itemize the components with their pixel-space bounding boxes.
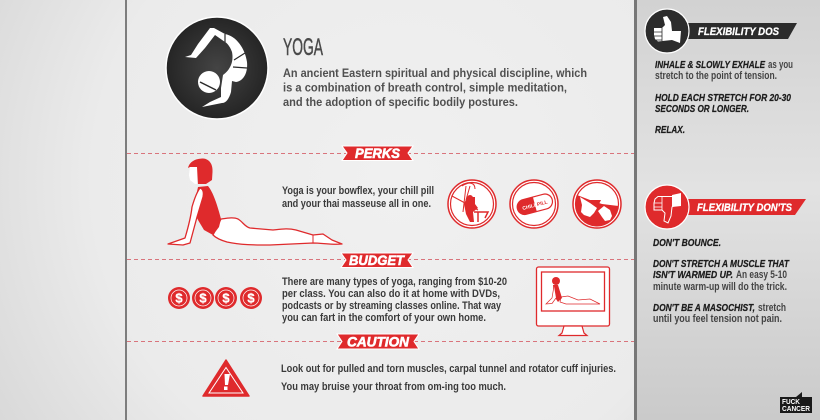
- logo: fuck cancer: CANCER: [782, 406, 810, 413]
- sidebar background: [636, 0, 820, 420]
- icon: four dollar coins: $: [222, 290, 230, 306]
- icon: chill pill: CHILL: [522, 202, 538, 212]
- don'ts text: ISN'T WARMED UP.: [653, 269, 733, 281]
- perks text: Yoga is your bowflex, your chill pill: [282, 185, 434, 197]
- don'ts text: DON'T BOUNCE.: [653, 237, 721, 249]
- perks text: [282, 185, 434, 210]
- caution text: Look out for pulled and torn muscles, carpal tunnel and rotator cuff injuries.: [281, 363, 616, 375]
- banner: don'ts: FLEXIBILITY DON'TS: [697, 202, 793, 214]
- illustration: cobra pose: [168, 158, 342, 245]
- banner: dos: FLEXIBILITY DOS: [698, 26, 780, 38]
- don'ts text: [653, 237, 790, 325]
- icon: bowflex: [448, 180, 496, 228]
- icon: massage hands: [573, 180, 621, 228]
- budget text: There are many types of yoga, ranging from $10-20: [282, 276, 507, 288]
- description: [283, 66, 587, 109]
- ribbon: budget: BUDGET: [349, 253, 406, 268]
- caution text: You may bruise your throat from om-ing too much.: [281, 381, 506, 393]
- don'ts text: minute warm-up will do the trick.: [653, 281, 787, 293]
- logo: fuck cancer: [780, 392, 812, 413]
- perks text: and your thai masseuse all in one.: [282, 198, 431, 210]
- description: An ancient Eastern spiritual and physical discipline, which: [283, 66, 587, 80]
- ribbon: perks: [342, 146, 413, 161]
- icon: chill pill: PILL: [536, 199, 548, 208]
- logo: fuck cancer: FUCK: [782, 399, 800, 406]
- icon: thumbs up: [645, 9, 689, 53]
- dos text: [655, 59, 793, 136]
- icon: yoga pose badge: [166, 17, 268, 119]
- ribbon: perks: PERKS: [355, 146, 400, 161]
- don'ts text: DON'T STRETCH A MUSCLE THAT: [653, 258, 790, 270]
- panel: flexibility don'ts: [645, 185, 806, 325]
- dos text: RELAX.: [655, 124, 685, 136]
- icon: thumbs down: [645, 185, 689, 229]
- icon: four dollar coins: $: [199, 290, 207, 306]
- don'ts text: stretch: [758, 302, 786, 314]
- dos text: HOLD EACH STRETCH FOR 20-30: [655, 92, 791, 104]
- dos text: stretch to the point of tension.: [655, 70, 777, 82]
- icon: four dollar coins: [168, 287, 262, 309]
- budget text: you can fart in the comfort of your own home.: [282, 312, 486, 324]
- don'ts text: DON'T BE A MASOCHIST,: [653, 302, 755, 314]
- title: YOGA: [283, 34, 323, 61]
- dos text: INHALE & SLOWLY EXHALE: [655, 59, 766, 71]
- budget text: [282, 276, 507, 324]
- panel: flexibility dos: [645, 9, 797, 136]
- icon: four dollar coins: $: [247, 290, 255, 306]
- budget text: per class. You can also do it at home with DVDs,: [282, 288, 500, 300]
- dos text: SECONDS OR LONGER.: [655, 103, 749, 115]
- budget text: podcasts or by streaming classes online. That way: [282, 300, 502, 312]
- description: and the adoption of specific bodily postures.: [283, 95, 518, 109]
- description: is a combination of breath control, simple meditation,: [283, 80, 567, 94]
- icon: four dollar coins: $: [175, 290, 183, 306]
- dos text: as you: [768, 59, 793, 71]
- icon: chill pill: [510, 180, 558, 228]
- caution text: [281, 363, 616, 393]
- banner: don'ts: [680, 199, 806, 215]
- icon: monitor with yoga video: [536, 267, 610, 336]
- don'ts text: An easy 5-10: [736, 269, 787, 281]
- ribbon: caution: CAUTION: [347, 334, 409, 350]
- panel: yoga header: [166, 17, 587, 119]
- icon: warning triangle: [203, 360, 249, 396]
- don'ts text: until you feel tension not pain.: [653, 313, 782, 325]
- banner: dos: [680, 23, 797, 39]
